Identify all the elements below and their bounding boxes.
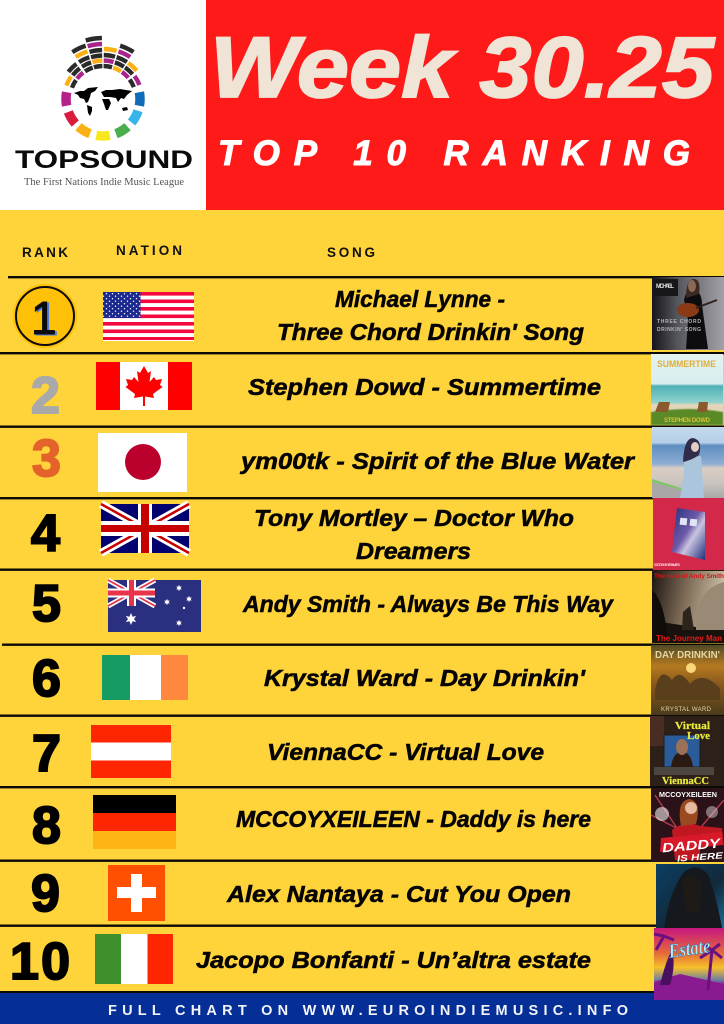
row dividers	[0, 276, 724, 993]
cover 2: Summertime: SUMMERTIME	[657, 359, 716, 369]
column headers	[22, 243, 375, 260]
logo: equalizer fan	[26, 22, 180, 176]
song 1 title: Three Chord Drinkin' Song	[277, 319, 584, 345]
flag: United Kingdom	[101, 504, 189, 553]
cover 1: Three Chord Drinkin' Song	[652, 277, 724, 350]
song 9 title: Alex Nantaya - Cut You Open	[226, 881, 571, 907]
title: week number: Week 30.25	[210, 20, 715, 116]
cover 1: Three Chord Drinkin' Song: THREE CHORD	[657, 319, 701, 325]
cover 8: Daddy is here: IS HERE	[677, 850, 724, 864]
logo: colored ring	[51, 47, 155, 151]
cover 8: Daddy is here: MCCOYXEILEEN	[659, 792, 717, 799]
cover 8: Daddy is here: DADDY	[661, 835, 722, 855]
cover 1: Three Chord Drinkin' Song: DRINKIN' SONG	[657, 327, 701, 333]
rank 1 badge	[13, 284, 77, 348]
cover 9: Cut You Open	[656, 864, 724, 928]
title panel	[206, 0, 724, 210]
cover 7: Virtual Love: ViennaCC	[662, 776, 709, 787]
song 1 title: Michael Lynne -	[335, 286, 505, 312]
logo: world map	[74, 87, 132, 116]
flag: Canada	[96, 362, 192, 410]
rank 1 badge: 1	[33, 293, 59, 345]
flag: Austria	[91, 725, 171, 778]
cover 2: Summertime	[651, 354, 723, 425]
footer text: FULL CHART ON WWW.EUROINDIEMUSIC.INFO	[108, 1003, 628, 1019]
cover 6: Day Drinkin': DAY DRINKIN'	[655, 650, 720, 661]
header: nation: NATION	[116, 243, 182, 258]
cover 10: Estate	[654, 928, 724, 1000]
cover 5: The Journey Man: The Journey Man	[656, 634, 722, 643]
rank 3: 3	[32, 430, 61, 488]
song 10 title: Jacopo Bonfanti - Un’altra estate	[196, 947, 591, 973]
flag: Ireland	[102, 655, 188, 700]
cover 6: Day Drinkin': KRYSTAL WARD	[661, 707, 712, 713]
song 1 title	[277, 286, 584, 345]
footer bar	[0, 993, 724, 1024]
logo tagline: The First Nations Indie Music League	[24, 177, 184, 188]
cover 4: Doctor Who Dreamers	[653, 498, 724, 570]
song 3 title: ym00tk - Spirit of the Blue Water	[240, 448, 636, 474]
song 4 title	[254, 505, 574, 564]
song 7 title: ViennaCC - Virtual Love	[267, 739, 544, 765]
rank 6: 6	[32, 650, 61, 708]
rank 9: 9	[31, 865, 60, 923]
header: song: SONG	[327, 245, 375, 260]
rank 1 badge: 1	[31, 292, 57, 344]
song 2 title: Stephen Dowd - Summertime	[248, 374, 601, 400]
flag: Italy	[95, 934, 173, 984]
cover 1: Three Chord Drinkin' Song: MICHAEL	[656, 284, 674, 290]
cover 7: Virtual Love	[650, 716, 724, 787]
logo wordmark: TOPSOUND	[15, 146, 193, 174]
flag: Switzerland	[108, 865, 165, 921]
cover 6: Day Drinkin'	[651, 645, 724, 715]
rank 10: 10	[10, 933, 70, 991]
song 4 title: Tony Mortley – Doctor Who	[254, 505, 574, 531]
subtitle: TOP 10 RANKING	[218, 134, 690, 173]
cover 8: Daddy is here	[651, 788, 724, 864]
cover 3: Spirit of the Blue Water	[652, 427, 724, 498]
cover 10: Estate: Estate	[666, 935, 712, 963]
flag: Japan	[98, 433, 187, 492]
header: rank: RANK	[22, 245, 68, 260]
rank 7: 7	[32, 725, 61, 783]
flag: Germany	[93, 795, 176, 849]
cover 7: Virtual Love: Love	[687, 731, 711, 742]
song 5 title: Andy Smith - Always Be This Way	[242, 591, 615, 617]
flag: United States	[103, 292, 194, 341]
logo panel	[0, 0, 206, 210]
rank 2: 2	[31, 367, 60, 425]
cover 5: The Journey Man: The best of Andy Smith	[654, 573, 724, 580]
rank 5: 5	[32, 575, 61, 633]
cover 7: Virtual Love: Virtual	[675, 721, 710, 732]
song 6 title: Krystal Ward - Day Drinkin'	[264, 665, 586, 691]
rank 4: 4	[31, 505, 60, 563]
song 8 title: MCCOYXEILEEN - Daddy is here	[236, 806, 591, 832]
song 4 title: Dreamers	[356, 538, 471, 564]
cover 2: Summertime: STEPHEN DOWD	[664, 418, 711, 424]
cover 4: Doctor Who Dreamers: DOCTOR WHO DREAMERS	[654, 563, 681, 567]
yellow chart background	[0, 210, 724, 993]
flag: Australia	[108, 580, 201, 632]
cover 5: The Journey Man	[652, 571, 724, 643]
rank 8: 8	[32, 797, 61, 855]
